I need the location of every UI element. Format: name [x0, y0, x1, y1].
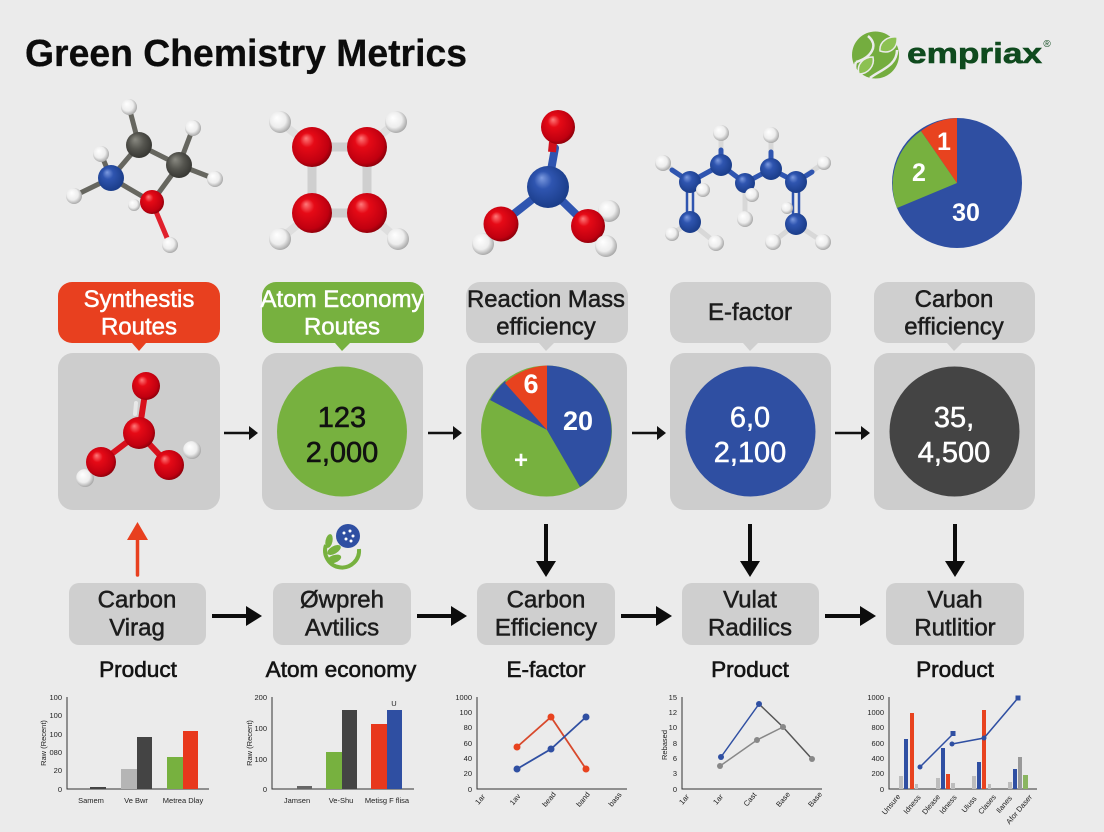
combo chart 5: 1000 — [867, 708, 884, 717]
combo chart 5: 400 — [871, 754, 884, 763]
panel: molecule — [58, 353, 220, 510]
combo chart 5: Dlease — [920, 793, 942, 816]
panel: green circle: 2,000 — [306, 437, 378, 469]
label: E-factor — [670, 282, 831, 351]
box: Carbon Efficiency: Efficiency — [495, 614, 597, 642]
molecule 4 — [655, 125, 831, 251]
box: Vulat Radilics: Radilics — [708, 614, 792, 642]
bar chart 1: Samem — [78, 796, 104, 805]
icon: leaf ring — [324, 524, 360, 568]
arrow: red up — [127, 522, 148, 575]
line chart 4: 10 — [669, 723, 677, 732]
panel: blue circle: 6,0 — [730, 402, 770, 434]
panel: pie chart: 6 — [523, 369, 539, 399]
combo chart 5: Ilanes — [994, 794, 1014, 815]
combo chart 5: 0 — [880, 785, 884, 794]
panel: dark circle: 35, — [934, 402, 974, 434]
arrow: panel 3 to 4 — [632, 426, 666, 440]
label: Atom Economy Routes — [260, 282, 424, 351]
arrow: panel 1 to 2 — [224, 426, 258, 440]
top pie chart — [892, 118, 1022, 248]
heading: Product 1: Product — [99, 657, 178, 682]
bar chart 2: U — [391, 699, 397, 708]
arrow: down to Vulat Radilics — [740, 524, 760, 577]
label: Reaction Mass efficiency: efficiency — [496, 314, 596, 340]
arrow: down to Carbon Efficiency — [536, 524, 556, 577]
line chart 4: 8 — [673, 739, 677, 748]
line chart 3: bass — [607, 790, 624, 808]
line chart 4: 15 — [669, 693, 677, 702]
line chart 4: 3 — [673, 769, 677, 778]
box: Vuah Rutlitior: Vuah — [927, 586, 983, 614]
combo chart 5: Clases — [976, 793, 998, 816]
label: Reaction Mass efficiency — [466, 282, 628, 351]
line chart 3: 0 — [468, 785, 472, 794]
box: Owpreh Avtilics — [273, 583, 411, 645]
bar chart 2: 100 — [254, 755, 267, 764]
bar chart 2: Jamsen — [284, 796, 310, 805]
label: Carbon efficiency: efficiency — [904, 314, 1004, 340]
panel: pie chart — [466, 353, 627, 510]
line chart 4: Base — [806, 790, 824, 809]
box: Owpreh Avtilics: Avtilics — [305, 614, 379, 642]
line chart 3 — [455, 693, 627, 809]
box: Owpreh Avtilics: Øwpreh — [300, 586, 384, 614]
panel: dark circle — [874, 353, 1035, 510]
line chart 4 — [660, 693, 824, 809]
box: Vuah Rutlitior — [886, 583, 1024, 645]
heading: E-factor: E-factor — [506, 657, 586, 682]
box: Carbon Efficiency: Carbon — [507, 586, 585, 614]
bar chart 1: Raw (Recent) — [39, 720, 48, 766]
box: Carbon Virag — [69, 583, 206, 645]
panel: green circle — [262, 353, 423, 510]
combo chart 5: Afor Daser — [1004, 792, 1034, 826]
molecule 3 — [472, 110, 620, 257]
combo chart 5: Idness — [902, 793, 923, 816]
logo: empriax: ® — [1043, 39, 1051, 50]
arrow: down to Vuah Rutlitior — [945, 524, 965, 577]
heading: Product 2: Product — [711, 657, 790, 682]
bar chart 1: 20 — [54, 766, 62, 775]
bar chart 1: 080 — [49, 748, 62, 757]
top pie chart: 2 — [912, 159, 926, 187]
combo chart 5 — [867, 693, 1037, 826]
box: Carbon Virag: Virag — [109, 614, 165, 642]
bar chart 2: 200 — [254, 693, 267, 702]
top pie chart: 30 — [952, 199, 980, 227]
title: Green Chemistry Metrics — [25, 33, 467, 75]
bar chart 2: 100 — [254, 724, 267, 733]
line chart 3: 20 — [464, 769, 472, 778]
line chart 3: 60 — [464, 739, 472, 748]
bar chart 1: 0 — [58, 785, 62, 794]
arrow: panel 2 to 3 — [428, 426, 462, 440]
box: Vulat Radilics — [682, 583, 819, 645]
combo chart 5: 800 — [871, 723, 884, 732]
logo: empriax: empriax — [907, 38, 1042, 70]
line chart 4: 6 — [673, 754, 677, 763]
line chart 3: 1000 — [455, 693, 472, 702]
combo chart 5: Idness — [938, 793, 959, 816]
panel: blue circle — [670, 353, 831, 510]
panel: green circle: 123 — [318, 402, 366, 434]
bar chart 2: Raw (Recent) — [245, 720, 254, 766]
heading: Atom economy: Atom economy — [266, 657, 417, 682]
arrow: lower 2 — [417, 606, 467, 626]
panel: dark circle: 4,500 — [918, 437, 990, 469]
arrow: lower 4 — [825, 606, 876, 626]
logo: empriax — [852, 32, 1051, 78]
bar chart 1: Metrea Dlay — [163, 796, 203, 805]
bar chart 2: 0 — [263, 785, 267, 794]
line chart 4: 1ar — [711, 792, 725, 806]
label: Reaction Mass efficiency: Reaction Mass — [467, 286, 625, 313]
line chart 3: band — [574, 790, 592, 809]
bar chart 2: Metisg F flisa — [365, 796, 410, 805]
label: Synthesis Routes — [58, 282, 220, 351]
line chart 3: bead — [540, 790, 558, 809]
line chart 3: 100 — [459, 708, 472, 717]
panel: pie chart: 20 — [563, 406, 593, 436]
line chart 3: 1av — [508, 792, 523, 807]
combo chart 5: Unsure — [880, 792, 902, 817]
label: Synthesis Routes: Routes — [101, 314, 177, 340]
line chart 3: 80 — [464, 723, 472, 732]
bar chart 2: Ve-Shu — [329, 796, 353, 805]
bar chart 1: 100 — [49, 693, 62, 702]
bar chart 1: 100 — [49, 730, 62, 739]
bar chart 1: Ve Bwr — [124, 796, 148, 805]
line chart 3: 1ar — [473, 792, 487, 806]
top pie chart: 1 — [937, 128, 951, 156]
panel: blue circle: 2,100 — [714, 437, 786, 469]
label: Synthesis Routes: Synthestis — [84, 286, 194, 313]
bar chart 2 — [245, 693, 414, 805]
box: Carbon Virag: Carbon — [98, 586, 176, 614]
line chart 4: Rebased — [660, 730, 669, 760]
combo chart 5: 200 — [871, 769, 884, 778]
line chart 4: 1ar — [677, 792, 691, 806]
line chart 4: 12 — [669, 708, 677, 717]
line chart 3: 40 — [464, 754, 472, 763]
molecule 2 — [269, 111, 409, 250]
combo chart 5: 600 — [871, 739, 884, 748]
combo chart 5: 1000 — [867, 693, 884, 702]
line chart 4: Cast — [742, 790, 759, 808]
label: Carbon efficiency — [874, 282, 1035, 351]
label: Atom Economy Routes: Atom Economy — [260, 286, 424, 313]
box: Vuah Rutlitior: Rutlitior — [914, 614, 996, 642]
heading: Product 3: Product — [916, 657, 995, 682]
line chart 4: 0 — [673, 785, 677, 794]
arrow: lower 3 — [621, 606, 672, 626]
arrow: panel 4 to 5 — [835, 426, 870, 440]
box: Vulat Radilics: Vulat — [723, 586, 777, 614]
label: Atom Economy Routes: Routes — [304, 314, 380, 340]
label: E-factor: E-factor — [708, 299, 792, 326]
combo chart 5: Uluss — [960, 794, 979, 814]
panel: pie chart: + — [514, 447, 528, 474]
bar chart 1 — [39, 693, 209, 805]
label: Carbon efficiency: Carbon — [915, 286, 993, 313]
box: Carbon Efficiency — [477, 583, 615, 645]
bar chart 1: 100 — [49, 711, 62, 720]
line chart 4: Base — [774, 790, 792, 809]
arrow: lower 1 — [212, 606, 262, 626]
molecule 1 — [66, 99, 223, 253]
